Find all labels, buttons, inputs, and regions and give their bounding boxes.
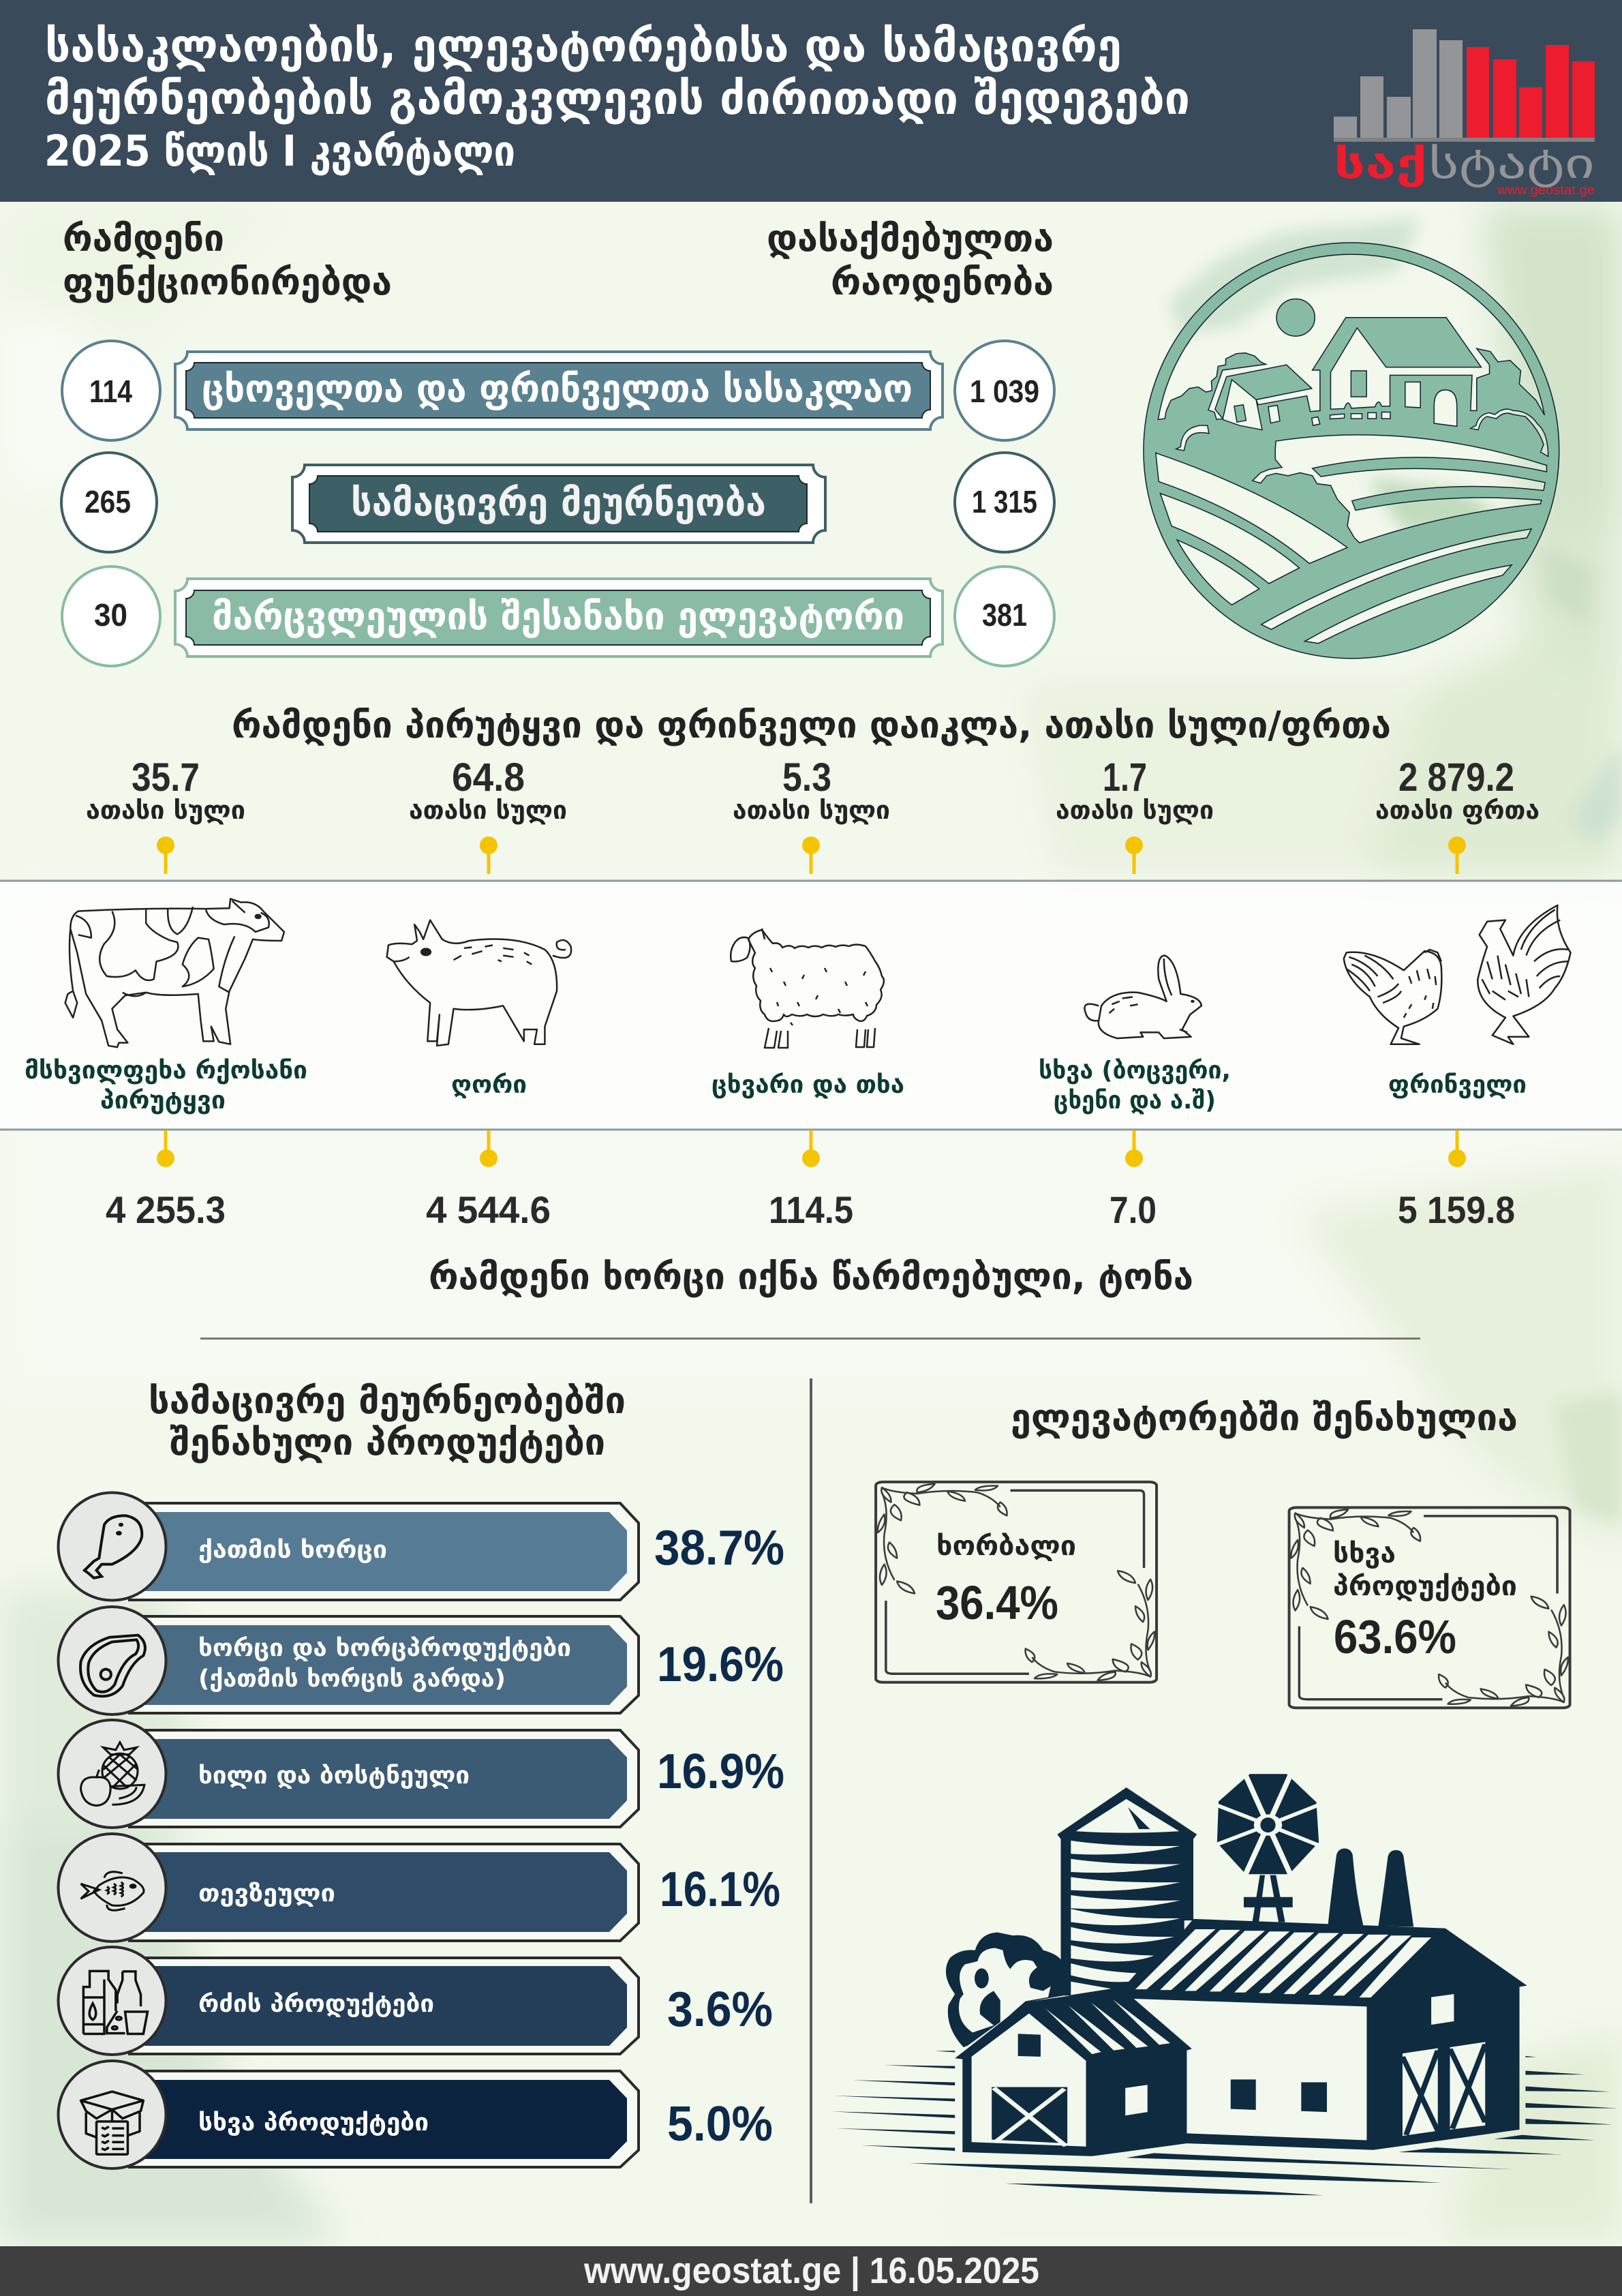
- panel: slaughterhouses row: 114: [89, 374, 132, 409]
- bar: chicken meat: 38.7%: [654, 1521, 784, 1575]
- label: other animals: სხვა (ბოცვერი,: [1039, 1057, 1231, 1085]
- logo: geostat: სტატი: [1428, 140, 1595, 188]
- panel: slaughterhouses row: 1 039: [970, 374, 1039, 409]
- bar: fruit and vegetables: ხილი და ბოსტნეული: [198, 1762, 470, 1789]
- bar: fish products: [59, 1834, 780, 1942]
- panel: cold storage row: სამაცივრე მეურნეობა: [351, 481, 766, 525]
- stat: other animals slaughtered: ათასი სული: [1056, 796, 1214, 825]
- label: large cattle: მსხვილფეხა რქოსანი: [25, 1057, 307, 1085]
- stat: poultry meat tonnes: [1398, 1130, 1515, 1231]
- icon: round farm landscape emblem: [1144, 243, 1559, 659]
- ground hatching: [831, 2051, 1618, 2195]
- stat: poultry slaughtered: 2 879.2: [1398, 755, 1514, 800]
- panel: cold storage row: 265: [85, 484, 131, 519]
- panel: grain elevator row: 381: [982, 597, 1027, 633]
- heading: products stored in cold storage: შენახული პროდუქტები: [170, 1421, 605, 1464]
- heading: products stored in cold storage: სამაცივრე მეურნეობებში: [149, 1379, 626, 1422]
- icon: box with checklist: [81, 2091, 143, 2154]
- bar: other products: [59, 2061, 773, 2169]
- bar: fish products: თევზეული: [198, 1880, 335, 1907]
- stat: other meat tonnes: [1110, 1130, 1157, 1231]
- title: მეურნეობების გამოკვლევის ძირითადი შედეგები: [45, 72, 1190, 125]
- heading: products stored in cold storage: [149, 1379, 626, 1464]
- icon: rabbit: [1084, 956, 1202, 1038]
- barn buildings: [955, 1919, 1527, 2156]
- panel: other products share: 63.6%: [1334, 1610, 1456, 1663]
- frame with vines: [1289, 1507, 1570, 1708]
- icon: fish: [81, 1872, 144, 1910]
- stat: other animals slaughtered: 1.7: [1103, 755, 1147, 800]
- title: [44, 20, 1190, 176]
- panel: cold storage row: 1 315: [972, 484, 1037, 519]
- panel: slaughterhouses row: [62, 341, 1054, 440]
- panel: grain elevator row: [62, 567, 1054, 666]
- icon: cow: [65, 898, 284, 1047]
- stat: sheep and goats slaughtered: [733, 755, 890, 874]
- bar: meat and meat products: (ქათმის ხორცის გარდა): [198, 1665, 506, 1693]
- bar: fruit and vegetables: 16.9%: [657, 1744, 784, 1799]
- panel: cold storage row: [61, 453, 1054, 552]
- stat: sheep and goats slaughtered: ათასი სული: [733, 796, 890, 825]
- label: poultry: ფრინველი: [1388, 1071, 1527, 1099]
- bar: fish products: 16.1%: [660, 1862, 780, 1917]
- heading: stored in elevators: ელევატორებში შენახულია: [1011, 1396, 1518, 1439]
- bar: dairy products: რძის პროდუქტები: [198, 1991, 434, 2018]
- icon: fruit: [81, 1742, 144, 1806]
- stat: other meat tonnes: 7.0: [1110, 1188, 1157, 1231]
- column heading: how many operate: რამდენი: [63, 217, 224, 260]
- stat: cattle slaughtered: [86, 755, 245, 874]
- title: 2025 წლის I კვარტალი: [44, 126, 515, 176]
- heading: slaughtered livestock and poultry: რამდენი პირუტყვი და ფრინველი დაიკლა, ათასი სული/ფრთა: [232, 704, 1391, 746]
- header band: [0, 0, 1622, 202]
- footer band: [0, 2246, 1622, 2296]
- label: sheep and goat: ცხვარი და თხა: [711, 1071, 904, 1099]
- column heading: how many operate: [63, 217, 392, 303]
- stat: pigs slaughtered: [409, 755, 567, 874]
- stat: cattle meat tonnes: [106, 1130, 226, 1231]
- bar: other products: 5.0%: [667, 2097, 773, 2151]
- stat: cattle meat tonnes: 4 255.3: [106, 1188, 226, 1231]
- stat: sheep and goat meat tonnes: 114.5: [769, 1188, 853, 1231]
- icon: dairy: [83, 1971, 147, 2034]
- column heading: number of employees: [767, 217, 1054, 303]
- icon: sheep: [731, 928, 884, 1048]
- frame with vines: [876, 1482, 1157, 1682]
- bar: dairy products: [59, 1947, 773, 2055]
- windmill: [1214, 1773, 1320, 1922]
- stat: poultry meat tonnes: 5 159.8: [1398, 1188, 1515, 1231]
- panel: grain elevator row: 30: [94, 597, 127, 633]
- stat: cattle slaughtered: 35.7: [132, 755, 200, 800]
- panel: wheat share: 36.4%: [936, 1576, 1058, 1629]
- stat: sheep and goat meat tonnes: [769, 1130, 853, 1231]
- illustration: farm with silo and windmill: [831, 1773, 1618, 2195]
- tree: [946, 1933, 1063, 2047]
- bar: fruit and vegetables: [59, 1720, 784, 1828]
- logo: geostat: www.geostat.ge: [1497, 183, 1595, 198]
- icon: steak: [80, 1635, 145, 1696]
- stat: pigs slaughtered: ათასი სული: [409, 796, 567, 825]
- cypress trees: [1328, 1849, 1413, 1927]
- icon: pig: [387, 920, 571, 1046]
- label: large cattle: [25, 1057, 307, 1115]
- column heading: number of employees: რაოდენობა: [831, 260, 1054, 303]
- panel: animals band: [0, 881, 1622, 1130]
- panel: other products share: [1289, 1507, 1570, 1708]
- heading: meat produced, tonnes: რამდენი ხორცი იქნა წარმოებული, ტონა: [429, 1255, 1193, 1298]
- silo: [1057, 1787, 1197, 1995]
- bar: meat and meat products: [59, 1607, 784, 1715]
- bar: chicken meat: [59, 1493, 784, 1601]
- panel: other products share: სხვა: [1333, 1539, 1396, 1569]
- logo: geostat: საქ: [1334, 140, 1427, 188]
- panel: slaughterhouses row: ცხოველთა და ფრინველთა სასაკლაო: [202, 367, 913, 411]
- label: pig: ღორი: [451, 1071, 527, 1099]
- column heading: how many operate: ფუნქციონირებდა: [63, 260, 392, 303]
- footer band: www.geostat.ge | 16.05.2025: [583, 2250, 1039, 2292]
- icon: hen and rooster: [1344, 905, 1571, 1044]
- bar: meat and meat products: ხორცი და ხორცპროდუქტები: [198, 1635, 571, 1662]
- stat: cattle slaughtered: ათასი სული: [86, 796, 245, 825]
- logo: geostat: [1334, 29, 1595, 198]
- stat: pig meat tonnes: [426, 1130, 551, 1231]
- stat: poultry slaughtered: [1375, 755, 1540, 874]
- icon: chicken leg: [85, 1515, 142, 1578]
- panel: other products share: პროდუქტები: [1333, 1571, 1517, 1602]
- stat: other animals slaughtered: [1056, 755, 1214, 874]
- stat: poultry slaughtered: ათასი ფრთა: [1375, 796, 1540, 825]
- panel: wheat share: ხორბალი: [936, 1531, 1076, 1562]
- bar: meat and meat products: 19.6%: [657, 1637, 784, 1692]
- label: other animals: ცხენი და ა.შ): [1054, 1087, 1216, 1115]
- panel: wheat share: [876, 1482, 1157, 1682]
- label: other animals: [1039, 1057, 1231, 1115]
- stat: sheep and goats slaughtered: 5.3: [782, 755, 831, 800]
- stat: pig meat tonnes: 4 544.6: [426, 1188, 551, 1231]
- bar: chicken meat: ქათმის ხორცი: [198, 1537, 387, 1564]
- label: large cattle: პირუტყვი: [100, 1087, 226, 1115]
- bar: dairy products: 3.6%: [667, 1982, 773, 2037]
- bar: other products: სხვა პროდუქტები: [198, 2109, 429, 2136]
- panel: grain elevator row: მარცვლეულის შესანახი ელევატორი: [212, 594, 904, 639]
- stat: pigs slaughtered: 64.8: [452, 755, 525, 800]
- column heading: number of employees: დასაქმებულთა: [767, 217, 1054, 260]
- title: სასაკლაოების, ელევატორებისა და სამაცივრე: [45, 20, 1122, 72]
